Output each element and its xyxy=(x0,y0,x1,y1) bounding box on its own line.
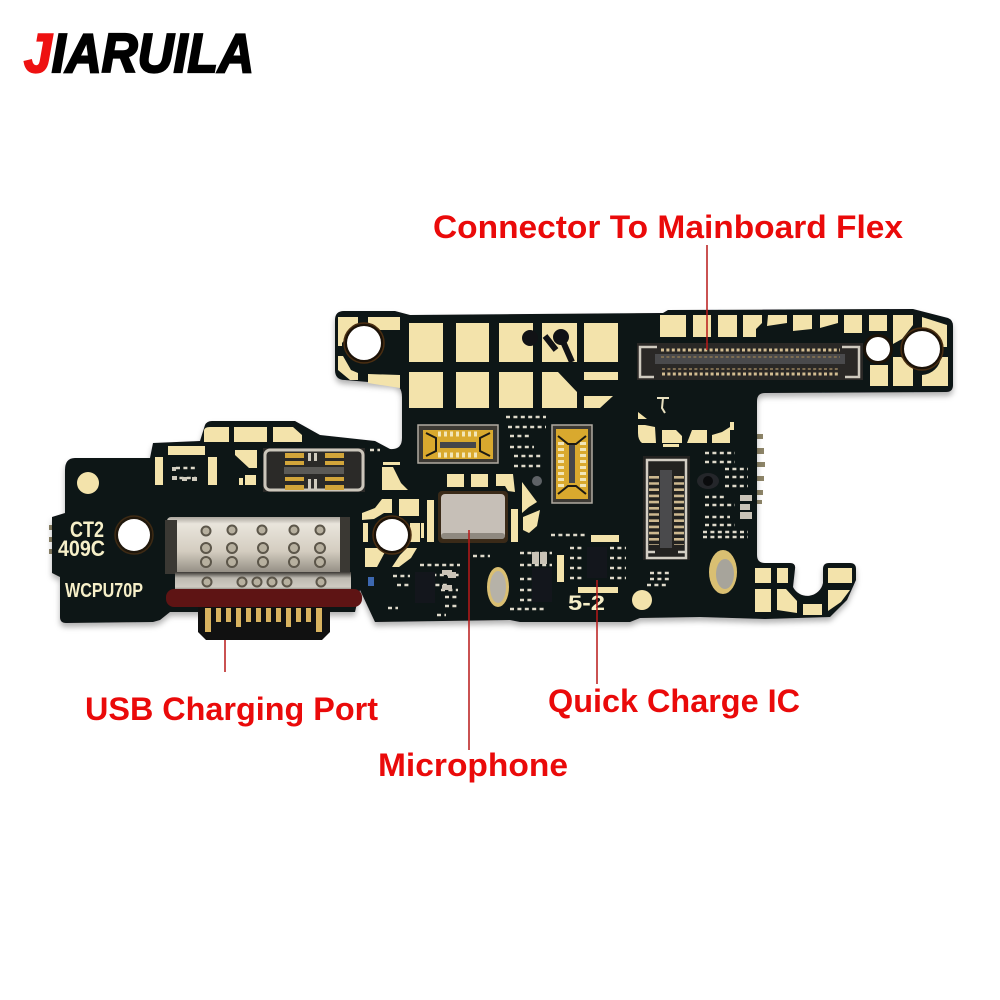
mounting holes xyxy=(115,323,943,554)
silkscreen text: 409C xyxy=(58,536,105,561)
silkscreen text: CT2 xyxy=(70,517,104,542)
red lip xyxy=(166,589,362,607)
gold pads: around left hole xyxy=(362,499,424,567)
black ICs xyxy=(415,547,607,603)
gold pads: under big connector xyxy=(638,412,734,447)
small blue component xyxy=(368,577,374,586)
gold pads: lower right hook xyxy=(755,568,852,615)
logo: JIARUILA: JIARUILA xyxy=(24,22,254,84)
leader line: microphone xyxy=(468,530,470,750)
USB-C port xyxy=(165,517,362,640)
leader line: connector xyxy=(706,245,708,350)
label: Quick Charge IC: Quick Charge IC xyxy=(548,683,800,719)
contact tongue xyxy=(198,607,330,640)
ovals xyxy=(487,550,737,607)
flex connector: centre vertical xyxy=(552,425,592,503)
traces cut through top pads xyxy=(545,336,572,362)
label: Connector To Mainboard Flex: Connector To Mainboard Flex xyxy=(433,209,903,245)
board edge teeth xyxy=(49,434,765,554)
microphone shield can xyxy=(438,491,508,543)
leader line: USB xyxy=(224,640,226,672)
board outline xyxy=(52,309,953,623)
circuit board xyxy=(49,309,953,640)
gold pads: top block xyxy=(338,317,618,408)
flex connector: centre horizontal xyxy=(418,425,498,463)
silkscreen mark xyxy=(657,398,669,413)
vias xyxy=(532,473,719,489)
gold pads: around microphone xyxy=(382,462,540,542)
silkscreen text: WCPU70P xyxy=(65,580,143,602)
SMD components xyxy=(172,417,748,615)
silkscreen text: 5-2 xyxy=(568,592,605,615)
gold fiducials xyxy=(77,472,652,610)
brighter capacitors xyxy=(442,495,752,590)
flex connector: vertical right xyxy=(643,456,690,560)
flex connector: left section xyxy=(172,448,365,492)
silkscreen text xyxy=(58,517,605,615)
label: USB Charging Port: USB Charging Port xyxy=(85,691,378,727)
gold pads: top right strip xyxy=(660,315,948,386)
leader line: IC xyxy=(596,580,598,684)
gold pads: left section xyxy=(155,427,619,593)
flex connector: large top (connector to mainboard) xyxy=(637,343,863,380)
label: Microphone: Microphone xyxy=(378,747,568,783)
port rivets xyxy=(201,526,326,586)
